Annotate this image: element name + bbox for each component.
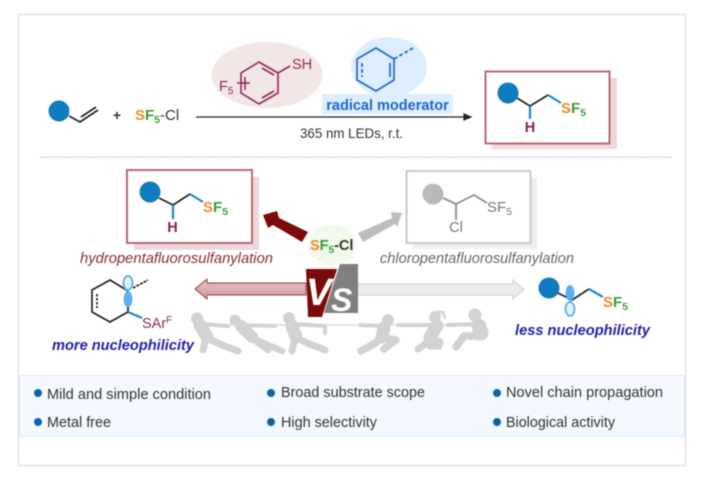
molecule: more nucleophilic radical: F xyxy=(166,315,172,326)
reactant: alkene xyxy=(48,100,98,122)
left double arrow xyxy=(195,279,306,299)
feature: novel chain propagation: Novel chain propagation xyxy=(506,385,663,401)
box: hydropentafluorosulfanylation product: SF xyxy=(203,199,222,216)
panel: features xyxy=(20,376,684,436)
box: hydropentafluorosulfanylation product: 5 xyxy=(222,206,228,218)
molecule: less nucleophilic radical: 5 xyxy=(622,301,628,313)
product box: SF xyxy=(561,100,580,117)
feature: metal free: Metal free xyxy=(47,415,111,431)
reagent: SF5-Cl: 5 xyxy=(154,114,160,126)
reaction arrow xyxy=(196,114,471,120)
product box: H xyxy=(525,120,535,136)
molecule: more nucleophilic radical: SAr xyxy=(142,316,166,332)
central reagent: SF5-Cl xyxy=(308,225,356,265)
molecule: less nucleophilic radical: SF xyxy=(603,294,622,311)
box: hydropentafluorosulfanylation product: H xyxy=(167,220,178,236)
tug of war silhouettes xyxy=(191,308,482,351)
feature: biological activity: Biological activity xyxy=(506,415,616,431)
label: more nucleophilicity: more nucleophilicity xyxy=(52,337,195,354)
feature: mild and simple condition: Mild and simple condition xyxy=(47,387,211,403)
feature: broad substrate scope: Broad substrate scope xyxy=(281,385,425,401)
right double arrow xyxy=(357,280,524,299)
catalyst: pentafluorothiophenol xyxy=(212,42,322,108)
molecule: more nucleophilic radical xyxy=(92,276,172,332)
catalyst: pentafluorothiophenol: F xyxy=(219,79,228,95)
label: hydropentafluorosulfanylation: hydropentafluorosulfanylation xyxy=(80,251,273,267)
VS badge: V xyxy=(306,272,334,314)
arrow: to hydro product xyxy=(263,211,308,242)
reagent: SF5-Cl: -Cl xyxy=(160,107,179,124)
label: radical moderator: radical moderator xyxy=(326,98,449,114)
central reagent: SF5-Cl: -Cl xyxy=(334,238,353,254)
central reagent: SF5-Cl: 5 xyxy=(329,245,335,256)
VS badge: S xyxy=(331,282,353,318)
plus sign: + xyxy=(113,107,121,123)
label: less nucleophilicity: less nucleophilicity xyxy=(515,322,651,339)
box: hydropentafluorosulfanylation product xyxy=(127,170,259,250)
product box xyxy=(486,72,617,149)
label: chloropentafluorosulfanylation: chloropentafluorosulfanylation xyxy=(380,251,574,267)
conditions: 365 nm LEDs, r.t. xyxy=(300,126,403,141)
box: chloropentafluorosulfanylation product: Cl xyxy=(449,220,463,236)
catalyst: pentafluorothiophenol: SH xyxy=(292,57,312,73)
arrow: to chloro product xyxy=(358,212,402,242)
central reagent: SF5-Cl: SF xyxy=(310,238,329,254)
product box: 5 xyxy=(580,107,586,119)
radical moderator: cyclohexadiene xyxy=(351,37,427,97)
box: chloropentafluorosulfanylation product: SF xyxy=(487,199,506,216)
box: chloropentafluorosulfanylation product xyxy=(406,171,537,249)
molecule: less nucleophilic radical xyxy=(538,278,628,316)
VS badge xyxy=(306,264,358,318)
feature: high selectivity: High selectivity xyxy=(281,415,378,431)
dotted divider xyxy=(40,156,672,158)
catalyst: pentafluorothiophenol: 5 xyxy=(228,86,234,97)
box: chloropentafluorosulfanylation product: 5 xyxy=(506,206,512,218)
reagent: SF5-Cl: SF xyxy=(135,107,154,124)
